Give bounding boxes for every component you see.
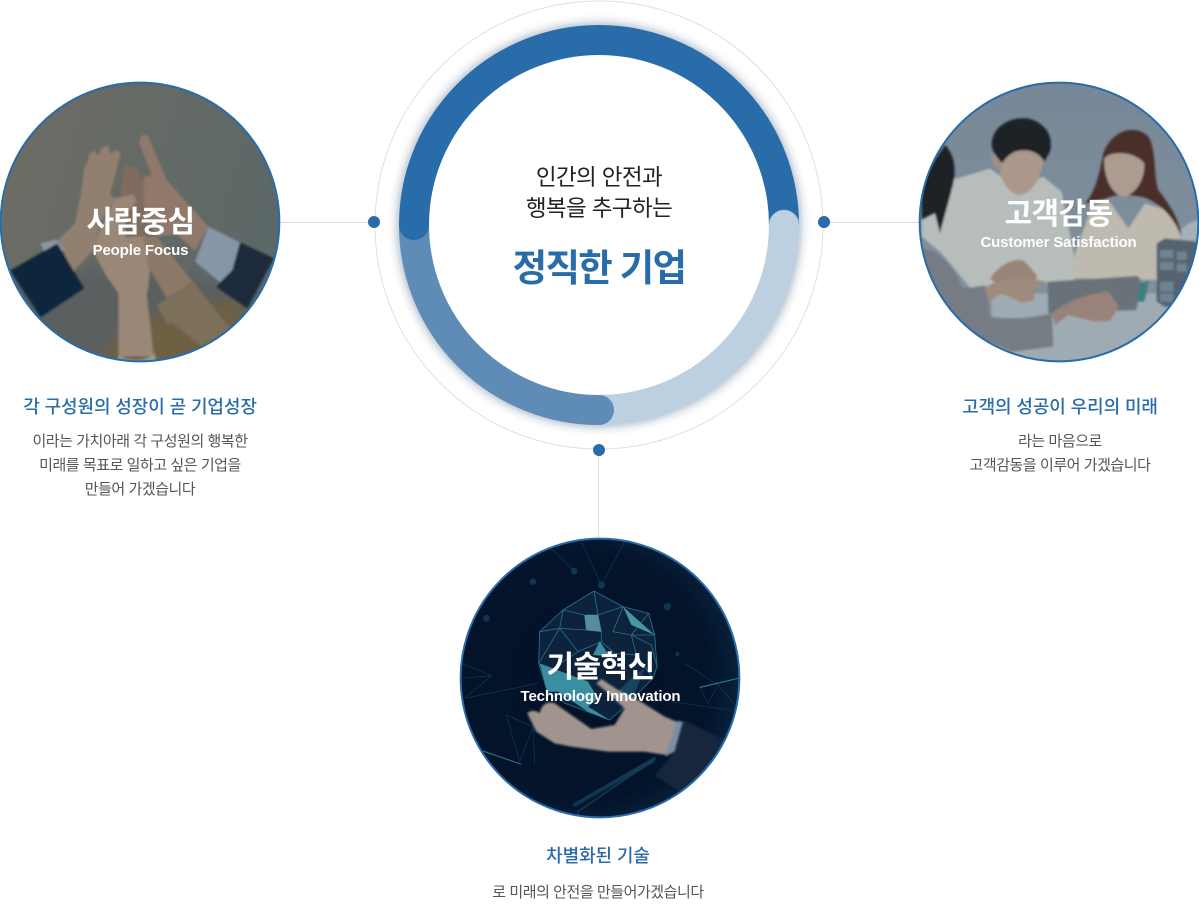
middle hand (121, 165, 149, 237)
central ring diagram (374, 0, 824, 450)
clasped hands (990, 259, 1038, 295)
panel: technology innovation (460, 538, 740, 818)
title: 기술혁신: 기술혁신 (546, 651, 654, 684)
central heading: 정직한 기업 (513, 247, 685, 289)
front hand and arm (93, 194, 154, 357)
model building (1157, 238, 1197, 307)
description (970, 433, 1150, 474)
central subtitle (526, 165, 672, 221)
ring segment: dark (414, 40, 784, 225)
ring segment: medium (414, 225, 599, 410)
man's face (998, 146, 1044, 195)
description: 라는 마음으로 (1018, 433, 1102, 450)
connector dot: left (368, 216, 380, 228)
title: 고객감동: 고객감동 (1004, 198, 1112, 231)
top right hand (140, 135, 208, 251)
panel: customer satisfaction (918, 82, 1199, 362)
ring segment: light (599, 225, 784, 410)
description: 만들어 가겠습니다 (85, 481, 195, 498)
reaching hand (985, 278, 1047, 303)
title: 사람중심: 사람중심 (86, 206, 194, 239)
central subtitle: 행복을 추구하는 (526, 196, 672, 221)
heading: 차별화된 기술 (546, 846, 650, 866)
woman's face (1104, 153, 1144, 197)
connector dot: bottom (593, 444, 605, 456)
central subtitle: 인간의 안전과 (536, 165, 662, 190)
description: 로 미래의 안전을 만들어가겠습니다 (492, 884, 704, 901)
seated woman's hair (922, 145, 955, 233)
description: 이라는 가치아래 각 구성원의 행복한 (32, 433, 248, 450)
heading: 고객의 성공이 우리의 미래 (962, 397, 1158, 417)
description: 고객감동을 이루어 가겠습니다 (970, 457, 1150, 474)
text block: people focus (23, 397, 257, 498)
photo: raised hands (0, 82, 280, 362)
sleeve (655, 720, 724, 790)
tablet (1048, 276, 1141, 313)
man's hair (992, 118, 1051, 163)
central text (513, 165, 685, 289)
tan arm (143, 237, 193, 298)
text block: technology innovation (492, 846, 704, 901)
connector dot: right (818, 216, 830, 228)
photo: network sphere above hand (460, 538, 740, 818)
hand (527, 679, 683, 807)
subtitle: Customer Satisfaction: Customer Satisfaction (980, 234, 1137, 251)
back left hand (58, 145, 121, 273)
panel: people focus (0, 82, 280, 362)
wireframe sphere (539, 591, 657, 720)
subtitle: People Focus: People Focus (93, 242, 188, 259)
text block: customer satisfaction (962, 397, 1158, 474)
heading: 각 구성원의 성장이 곧 기업성장 (23, 397, 257, 417)
description (32, 433, 248, 498)
photo: consultation meeting (918, 82, 1199, 362)
description: 미래를 목표로 일하고 싶은 기업을 (39, 457, 241, 474)
woman's hair (1085, 130, 1182, 237)
foreground sleeve (922, 248, 1053, 352)
woman's blouse (1073, 200, 1180, 280)
subtitle: Technology Innovation: Technology Innovation (521, 688, 680, 705)
man's shirt (922, 168, 1075, 292)
